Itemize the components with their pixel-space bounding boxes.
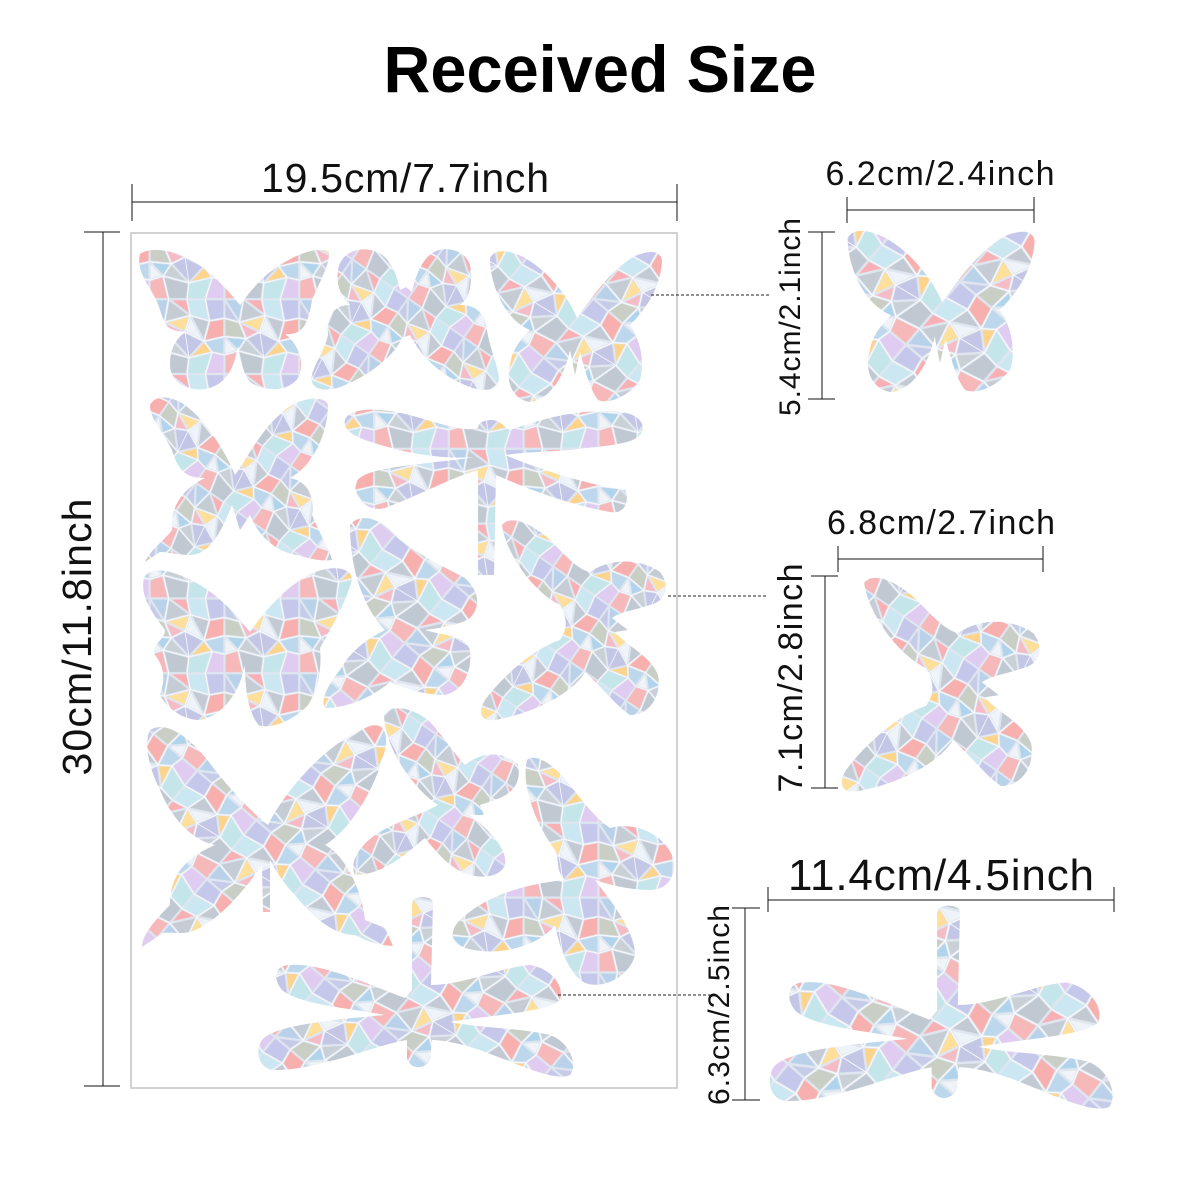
- sticker: butterfly 3: [490, 251, 662, 402]
- width label: butterfly 3: [826, 155, 1054, 223]
- sticker: dragonfly 1: [345, 410, 643, 575]
- height label: butterfly 6: 7.1cm/2.8inch: [772, 564, 810, 792]
- sticker: dragonfly 2: [258, 897, 573, 1077]
- enlarged dragonfly 2: [770, 906, 1113, 1109]
- sticker: butterfly 1: [139, 250, 329, 389]
- width label: butterfly 6: 6.8cm/2.7inch: [827, 504, 1055, 542]
- height label: dragonfly 2: [703, 905, 760, 1105]
- dimension: sheet height: 30cm/11.8inch: [54, 498, 100, 776]
- width label: dragonfly 2: 11.4cm/4.5inch: [788, 851, 1094, 900]
- title: Received Size: [384, 32, 816, 106]
- sticker: butterfly 7: [143, 568, 352, 726]
- width label: butterfly 3: 6.2cm/2.4inch: [826, 155, 1054, 193]
- sticker: butterfly 8: [142, 725, 393, 947]
- sticker: butterfly 10: [453, 758, 674, 985]
- sticker: butterfly 4: [145, 398, 332, 562]
- width label: butterfly 6: [827, 504, 1055, 572]
- enlarged butterfly 6: [842, 578, 1040, 792]
- leader line: butterfly 3: [651, 294, 770, 296]
- height label: dragonfly 2: 6.3cm/2.5inch: [703, 905, 736, 1105]
- enlarged butterfly 3: [848, 231, 1035, 392]
- leader line: butterfly 6: [668, 595, 768, 597]
- sticker: butterfly 9: [353, 708, 519, 877]
- dimension: sheet width: 19.5cm/7.7inch: [261, 155, 549, 201]
- sticker: butterfly 6: [481, 520, 666, 720]
- height label: butterfly 3: 5.4cm/2.1inch: [774, 218, 807, 416]
- panel: sticker sheet: [131, 233, 677, 1088]
- sticker: butterfly 5: [323, 518, 477, 708]
- sticker: butterfly 2: [311, 249, 499, 390]
- height label: butterfly 3: [774, 218, 835, 416]
- leader line: dragonfly 2: [558, 994, 710, 996]
- dimension: sheet width: [132, 155, 677, 221]
- dimension: sheet height: [54, 232, 120, 1086]
- height label: butterfly 6: [772, 564, 838, 792]
